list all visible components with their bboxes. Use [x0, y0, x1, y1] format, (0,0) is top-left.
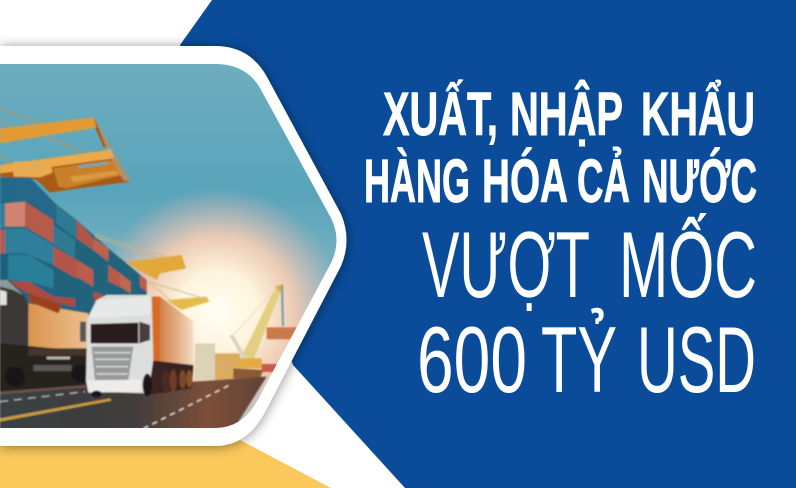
distant crane arms [0, 255, 297, 430]
white photo frame [0, 46, 346, 446]
title line 2: HÀNG [364, 147, 470, 215]
title line 2: HÓA [482, 147, 568, 215]
title [364, 80, 757, 412]
title line 1: NHẬP [510, 80, 623, 148]
yard crane [240, 285, 283, 360]
far buildings [195, 343, 215, 380]
upper crane arm [0, 109, 131, 193]
truck cab [86, 295, 153, 393]
locomotive [28, 303, 88, 353]
title line 4: 600 [417, 307, 527, 412]
yellow corner shape [0, 440, 331, 488]
title line 4: TỶ [541, 307, 617, 412]
title line 1: XUẤT, [383, 80, 498, 148]
truck trailer [160, 297, 193, 365]
container stack [0, 177, 165, 320]
port and logistics photo [0, 64, 350, 430]
title line 4 [417, 307, 756, 412]
title line 3: VƯỢT [422, 212, 590, 317]
blue background panel [180, 0, 796, 488]
title line 2: CẢ [577, 147, 630, 215]
title line 2 [364, 147, 757, 215]
title line 1 [383, 80, 755, 148]
road [0, 377, 267, 430]
